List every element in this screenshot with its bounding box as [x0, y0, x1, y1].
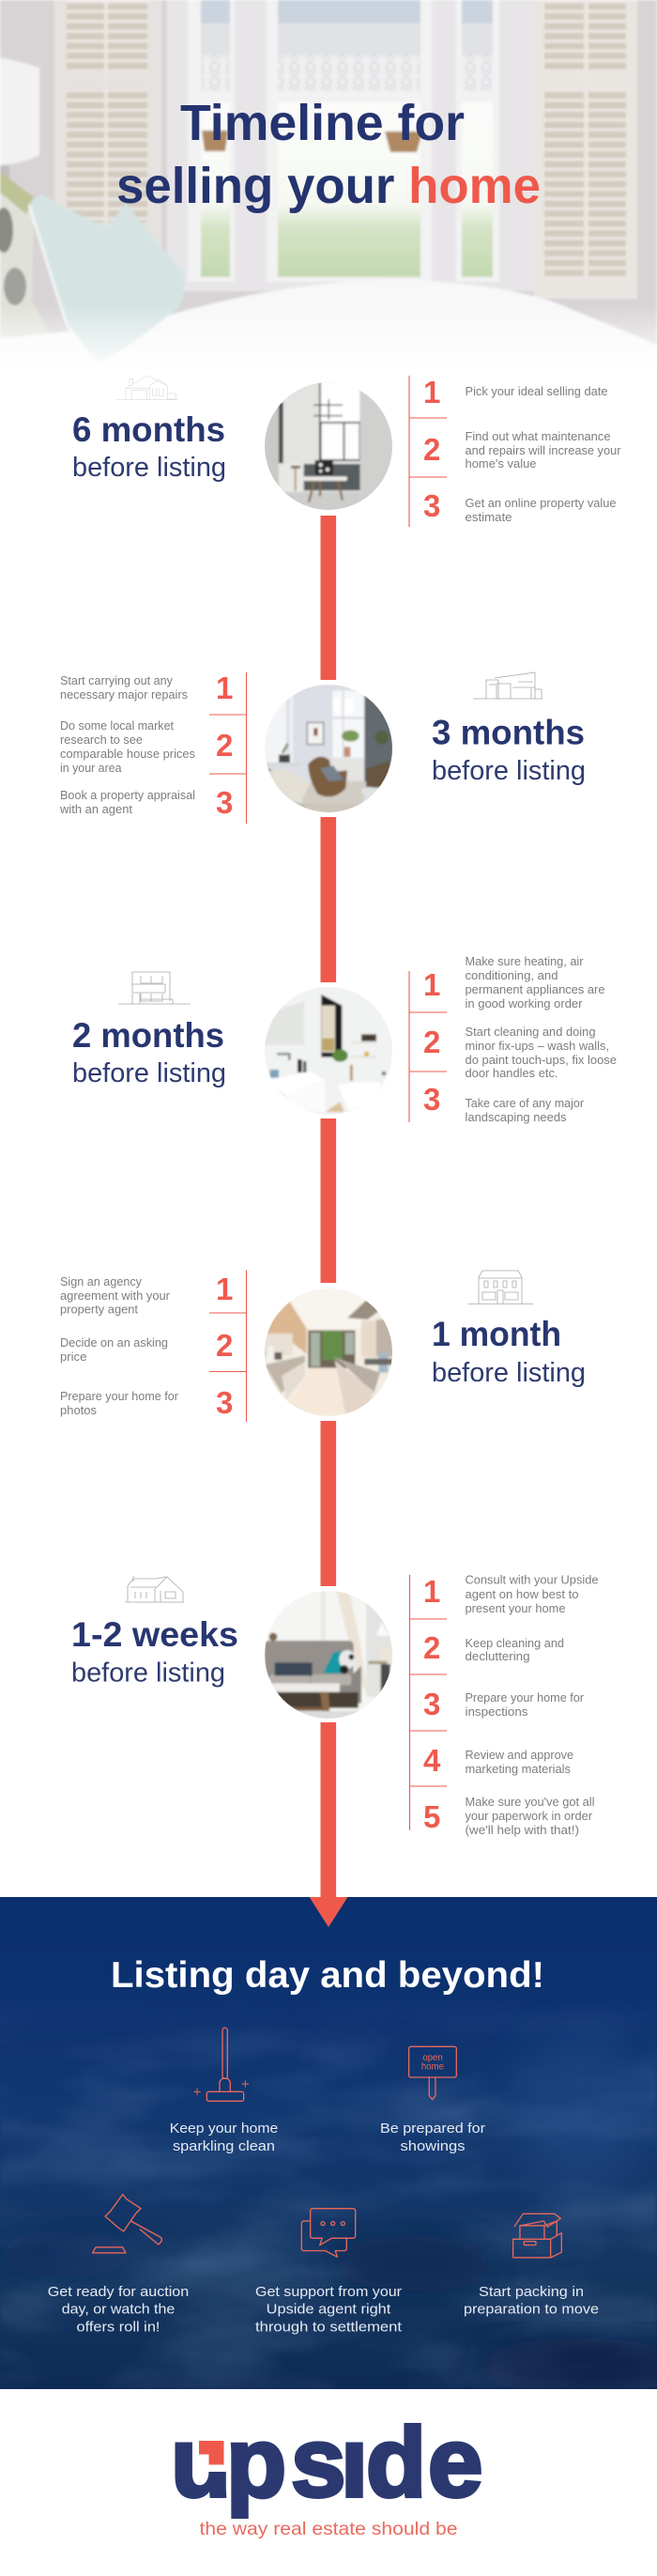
numbers: 2 — [423, 1630, 440, 1665]
steps: price — [60, 1350, 86, 1364]
numbers — [423, 967, 440, 1117]
icon: cottage — [125, 1576, 184, 1602]
steps: necessary major repairs — [60, 688, 188, 702]
heading: 1-2 weeks — [71, 1615, 238, 1654]
section: 2 months — [72, 955, 617, 1124]
steps: marketing materials — [466, 1763, 571, 1776]
numbers: 3 — [423, 1687, 440, 1721]
title: selling your home — [116, 158, 541, 214]
steps: Get an online property value — [466, 497, 617, 510]
panel: listing day and beyond — [0, 1897, 657, 2395]
rule lines — [409, 971, 447, 1122]
steps: (we'll help with that!) — [466, 1824, 579, 1837]
photo: living room — [265, 382, 392, 510]
icon: modern house — [473, 672, 542, 699]
arrow — [310, 1897, 347, 1927]
steps: permanent appliances are — [466, 983, 605, 996]
numbers — [423, 375, 440, 523]
item: clean — [170, 2028, 278, 2154]
heading: 1 month — [432, 1315, 561, 1353]
steps: estimate — [466, 511, 512, 524]
numbers: 5 — [423, 1799, 440, 1834]
caption: Start packing in — [479, 2285, 584, 2300]
caption — [255, 2285, 402, 2335]
steps: Start cleaning and doing — [466, 1026, 596, 1039]
photo: sofa — [265, 1591, 392, 1719]
caption: showings — [400, 2139, 466, 2154]
numbers: 1 — [216, 671, 233, 705]
caption — [380, 2121, 485, 2154]
title — [116, 95, 541, 214]
caption — [464, 2285, 599, 2318]
steps: Find out what maintenance — [466, 430, 611, 443]
numbers: 3 — [423, 488, 440, 523]
steps: minor fix-ups – wash walls, — [466, 1040, 609, 1053]
steps — [59, 674, 195, 816]
icon: gavel — [93, 2195, 161, 2253]
caption — [48, 2285, 189, 2335]
numbers — [216, 671, 233, 820]
title: Timeline for — [180, 95, 465, 151]
caption: day, or watch the — [62, 2303, 175, 2318]
timeline bar — [321, 516, 336, 1901]
steps: Pick your ideal selling date — [466, 385, 608, 398]
steps: property agent — [60, 1303, 139, 1317]
hero photo: bedroom window — [0, 0, 657, 379]
heading: 3 months — [432, 714, 585, 751]
rule lines — [409, 1575, 447, 1830]
steps: agent on how best to — [466, 1588, 579, 1601]
numbers: 2 — [423, 1025, 440, 1059]
heading: 2 months — [72, 1016, 224, 1055]
icon: terrace house — [468, 1271, 533, 1303]
steps: Decide on an asking — [60, 1336, 168, 1350]
icon: open home sign: open — [422, 2053, 443, 2063]
steps: Consult with your Upside — [466, 1574, 599, 1587]
numbers: 4 — [423, 1743, 441, 1778]
subheading: before listing — [432, 1358, 586, 1388]
steps: Make sure you've got all — [466, 1796, 595, 1809]
icon: open home sign — [409, 2046, 456, 2100]
steps: Prepare your home for — [466, 1691, 584, 1704]
steps: photos — [60, 1404, 97, 1417]
steps: agreement with your — [60, 1289, 170, 1303]
icon: townhouse — [118, 972, 191, 1004]
item: packing — [464, 2214, 599, 2318]
steps: door handles etc. — [466, 1067, 558, 1080]
steps: Take care of any major — [466, 1097, 584, 1110]
steps: decluttering — [466, 1650, 530, 1663]
subheading: before listing — [432, 756, 586, 786]
item: auction — [48, 2195, 189, 2335]
steps: Prepare your home for — [60, 1390, 178, 1403]
heading: 6 months — [72, 410, 225, 449]
steps: in your area — [60, 762, 122, 775]
steps: present your home — [466, 1602, 566, 1615]
section: 1 month — [60, 1270, 586, 1423]
steps: research to see — [60, 733, 143, 747]
caption: Upside agent right — [267, 2303, 390, 2318]
rule lines — [409, 376, 447, 527]
numbers: 1 — [423, 1574, 440, 1609]
caption: through to settlement — [255, 2320, 402, 2335]
tagline: the way real estate should be — [199, 2520, 458, 2539]
item: showings — [380, 2046, 485, 2154]
numbers: 1 — [216, 1272, 233, 1306]
subheading: before listing — [72, 453, 226, 483]
numbers: 2 — [216, 728, 233, 763]
caption: preparation to move — [464, 2303, 599, 2318]
subheading: before listing — [72, 1058, 226, 1088]
steps: do paint touch-ups, fix loose — [466, 1054, 617, 1067]
steps: home's value — [466, 457, 537, 470]
caption: offers roll in! — [77, 2320, 160, 2335]
numbers: 2 — [423, 432, 440, 467]
steps: comparable house prices — [60, 748, 195, 761]
numbers — [216, 1272, 233, 1420]
steps: Sign an agency — [60, 1275, 143, 1288]
steps — [466, 1574, 599, 1837]
steps: inspections — [466, 1705, 527, 1719]
photo: bathroom — [265, 987, 392, 1115]
steps: your paperwork in order — [466, 1810, 592, 1823]
logo: upside: upside — [171, 2408, 482, 2518]
steps: Start carrying out any — [60, 674, 174, 687]
caption — [170, 2121, 278, 2154]
rule lines — [209, 672, 246, 824]
steps — [466, 385, 621, 524]
steps: Do some local market — [60, 719, 175, 733]
icon: chat bubbles — [301, 2209, 356, 2257]
icon: open home sign: home — [421, 2061, 444, 2072]
steps — [60, 1275, 178, 1417]
numbers: 3 — [216, 1385, 233, 1420]
steps: and repairs will increase your — [466, 444, 621, 457]
caption: Keep your home — [170, 2121, 278, 2136]
steps: with an agent — [59, 803, 133, 816]
icon: mop — [194, 2028, 249, 2101]
numbers: 1 — [423, 967, 440, 1002]
photo: kitchen — [265, 1288, 392, 1416]
caption: Get ready for auction — [48, 2285, 189, 2300]
rule lines — [209, 1270, 246, 1422]
steps: Book a property appraisal — [60, 789, 195, 802]
numbers — [423, 1574, 441, 1834]
section: 3 months — [59, 671, 586, 824]
steps: Keep cleaning and — [466, 1637, 564, 1650]
photo: lounge — [265, 685, 392, 812]
numbers: 2 — [216, 1328, 233, 1363]
numbers: 3 — [216, 785, 233, 820]
steps: in good working order — [466, 997, 582, 1010]
steps: conditioning, and — [466, 969, 558, 982]
icon: house — [115, 376, 178, 400]
caption: sparkling clean — [173, 2139, 275, 2154]
section: 1-2 weeks — [71, 1574, 599, 1837]
steps — [466, 955, 617, 1124]
steps: landscaping needs — [466, 1111, 567, 1124]
item: support — [255, 2209, 402, 2335]
numbers: 3 — [423, 1082, 440, 1117]
subheading: before listing — [71, 1658, 225, 1689]
icon: boxes — [513, 2214, 561, 2258]
steps: Review and approve — [466, 1749, 573, 1762]
section: 6 months — [72, 375, 621, 527]
steps: Make sure heating, air — [466, 955, 584, 968]
caption: Get support from your — [255, 2285, 402, 2300]
caption: Be prepared for — [380, 2121, 485, 2136]
numbers: 1 — [423, 375, 440, 409]
heading: Listing day and beyond! — [111, 1955, 544, 1996]
logo mark: red corner — [194, 2415, 363, 2472]
